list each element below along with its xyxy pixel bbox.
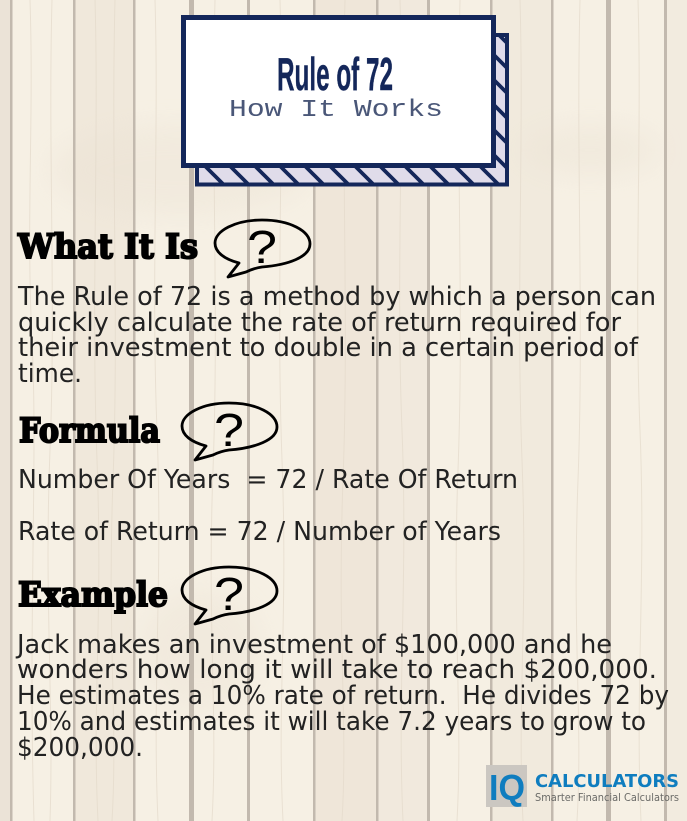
body text: Example: $200,000. [17, 733, 143, 763]
body text: Example: He estimates a 10% rate of return. He divides 72 by [17, 681, 669, 711]
body text: Example: 10% and estimates it will take 7.2 years to grow to [17, 707, 646, 737]
formula: rate of return: Rate of Return = 72 / Number of Years [18, 517, 501, 547]
logo: IQ Calculators: IQ [489, 767, 525, 808]
icon: question speech bubble 3 [182, 567, 277, 624]
logo tagline: Smarter Financial Calculators [535, 792, 679, 804]
subtitle text: How It Works [229, 97, 443, 124]
body text: Example: wonders how long it will take to reach $200,000. [17, 655, 657, 685]
heading: Formula: Formula [19, 411, 160, 451]
title banner [184, 18, 507, 184]
icon: question speech bubble 1: ? [247, 221, 277, 273]
striped back panel [197, 35, 507, 184]
formula: number of years: Number Of Years = 72 / Rate Of Return [18, 465, 518, 495]
icon: question speech bubble 2 [182, 403, 277, 460]
heading: Example: Example [18, 575, 168, 615]
logo: IQ Calculators [486, 765, 679, 808]
logo mark [486, 765, 527, 807]
body text: What It Is [17, 282, 656, 389]
body text: What It Is: time. [18, 359, 82, 389]
title text: Rule of 72 [277, 48, 393, 100]
heading: What It Is: What It Is [17, 227, 198, 267]
front white panel [184, 18, 494, 166]
icon: question speech bubble 3: ? [214, 568, 244, 620]
body text: Example [15, 630, 669, 763]
body text: Example: Jack makes an investment of $100,000 and he [15, 630, 612, 660]
body text: What It Is: The Rule of 72 is a method by which a person can [17, 282, 656, 312]
logo wordmark: CALCULATORS [535, 771, 679, 792]
icon: question speech bubble 2: ? [214, 404, 244, 456]
body text: What It Is: quickly calculate the rate of return required for [18, 308, 622, 338]
body text: What It Is: their investment to double in a certain period of [18, 333, 639, 363]
icon: question speech bubble 1 [215, 220, 310, 277]
